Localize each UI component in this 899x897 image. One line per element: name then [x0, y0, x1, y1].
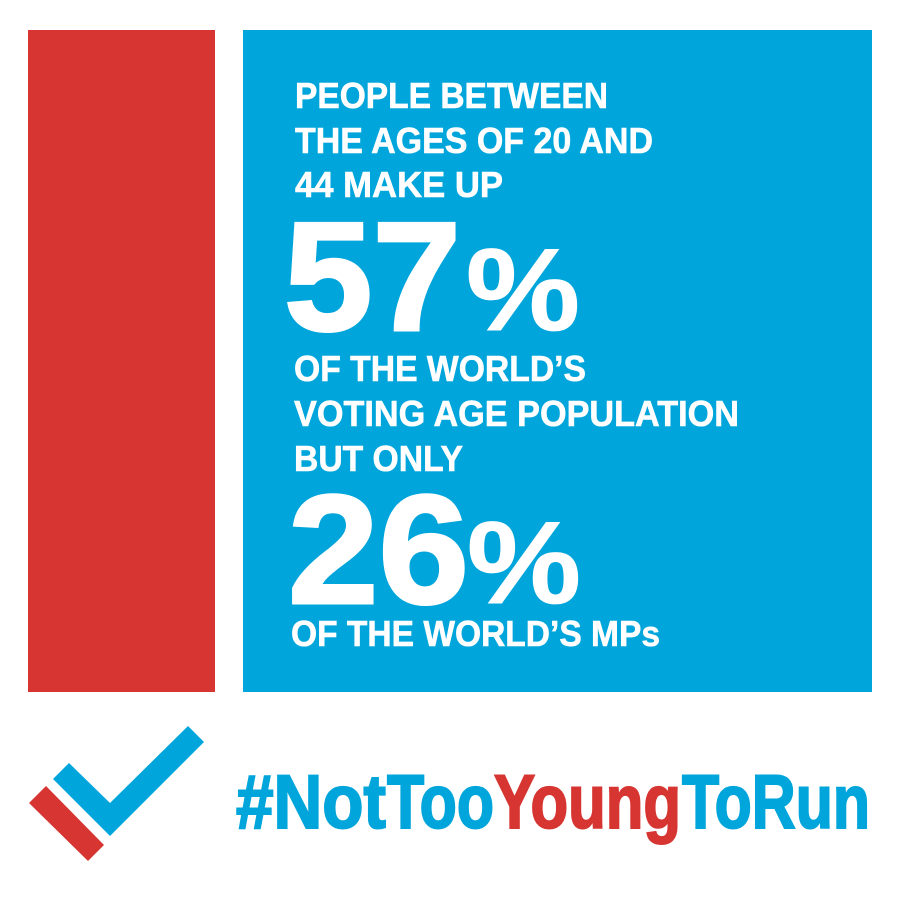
text block: voting age population: OF THE WORLD’S — [294, 348, 586, 389]
hashtag: Too — [387, 760, 494, 845]
panel: red bar — [28, 30, 215, 692]
hashtag: #Not — [236, 760, 386, 845]
text block: intro — [295, 75, 653, 205]
icon: check mark logo — [29, 726, 204, 861]
statistic: 26 percent — [288, 463, 581, 636]
statistic: 26 percent: 26 — [288, 463, 469, 636]
text block: world's MPs: OF THE WORLD’S MPs — [291, 613, 660, 654]
statistic: 57 percent: 57 — [284, 190, 461, 363]
text block: voting age population — [294, 348, 739, 479]
panel: blue statistics panel — [243, 30, 872, 692]
statistic: 57 percent — [284, 190, 580, 363]
text block: intro: THE AGES OF 20 AND — [295, 120, 653, 161]
hashtag — [236, 760, 870, 845]
text block: intro: 44 MAKE UP — [295, 164, 503, 205]
text block: intro: PEOPLE BETWEEN — [295, 75, 608, 116]
statistic: 57 percent: % — [466, 224, 580, 355]
text block: voting age population: VOTING AGE POPULATION — [294, 393, 739, 434]
text block: voting age population: BUT ONLY — [294, 438, 463, 479]
hashtag: Young — [494, 760, 681, 845]
statistic: 26 percent: % — [467, 497, 581, 628]
